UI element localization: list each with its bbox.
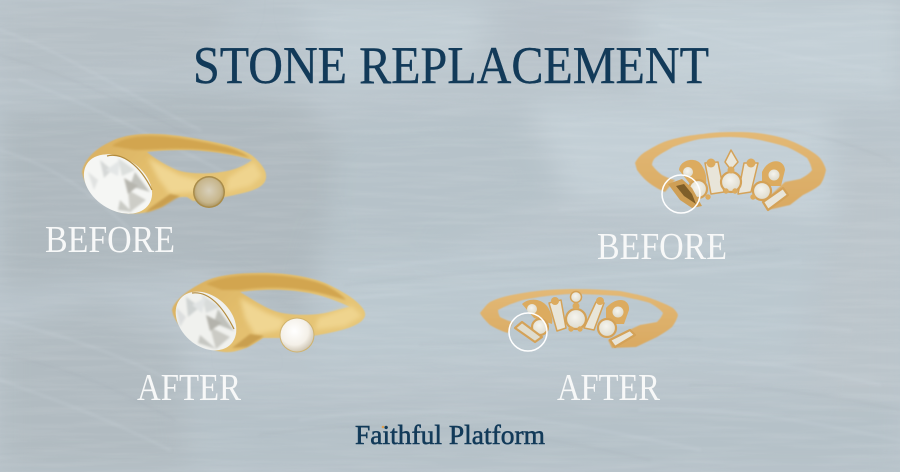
ring body (82, 134, 266, 214)
inner band surface (112, 136, 250, 158)
ring: oval diamond before, dull stone (78, 134, 266, 220)
label: after, left ring: AFTER (137, 366, 242, 408)
crown setting (679, 150, 788, 210)
ring body (172, 273, 365, 352)
lower shadow (145, 194, 180, 213)
gold arches (679, 160, 706, 184)
diamond (176, 292, 236, 350)
ring: diamond crown band after (480, 289, 678, 351)
gold caps and beads (551, 297, 604, 332)
label: before, right ring: BEFORE (597, 225, 727, 267)
inner band surface (206, 275, 346, 300)
gold arches (522, 300, 552, 324)
band (635, 132, 826, 210)
empty socket (668, 179, 702, 208)
band (480, 289, 678, 348)
replaced baguette (515, 322, 542, 342)
shoulder highlight (240, 298, 285, 335)
highlight circle (509, 313, 547, 351)
stones (683, 167, 693, 177)
pearl (280, 318, 314, 352)
title: STONE REPLACEMENT (193, 36, 709, 95)
crown setting (515, 292, 635, 347)
brand wordmark: Faithful Platform (355, 420, 545, 450)
right shank highlight (226, 162, 262, 192)
ring: oval diamond after, with pearl (166, 273, 365, 357)
bezel shadow (192, 293, 234, 329)
lower shadow (232, 334, 264, 348)
label: after, right ring: AFTER (557, 366, 661, 408)
ring: diamond crown band before (635, 132, 826, 213)
label: before, left ring: BEFORE (45, 218, 175, 260)
stones (527, 304, 537, 314)
gold caps and beads (705, 158, 756, 200)
dull stone (193, 176, 225, 208)
diamond (84, 154, 152, 214)
highlight circle (662, 175, 700, 213)
right shank highlight (315, 306, 362, 330)
shoulder highlight (148, 158, 205, 194)
bezel shadow (107, 155, 152, 190)
